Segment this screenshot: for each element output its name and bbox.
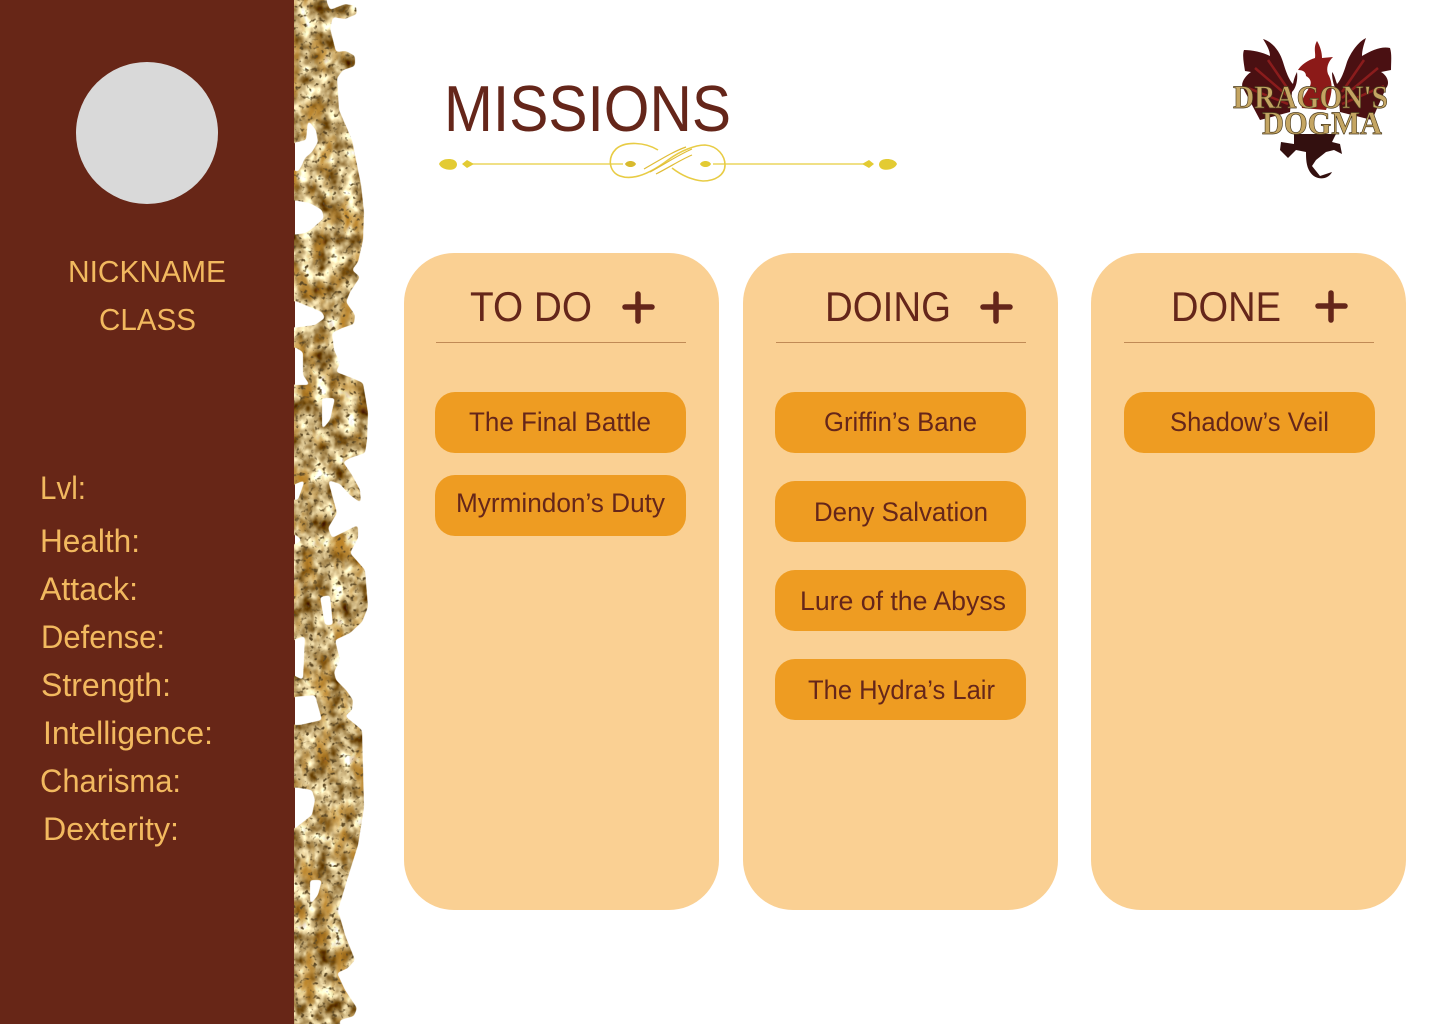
card: the hydra's lair: The Hydra’s Lair bbox=[808, 675, 995, 705]
card: myrmindon's duty bbox=[435, 475, 686, 536]
panel: character sidebar bbox=[0, 0, 295, 1024]
card: the hydra's lair bbox=[775, 659, 1026, 720]
card: griffin's bane bbox=[775, 392, 1026, 453]
panel: to do bbox=[404, 253, 719, 910]
card: shadow's veil: Shadow’s Veil bbox=[1170, 407, 1329, 437]
icon: plus bbox=[983, 294, 1010, 321]
title flourish divider bbox=[439, 143, 897, 181]
card: lure of the abyss bbox=[775, 570, 1026, 631]
stat: strength: Strength: bbox=[41, 667, 171, 703]
stat: dexterity: Dexterity: bbox=[43, 811, 179, 847]
panel: doing bbox=[743, 253, 1058, 910]
nickname: NICKNAME bbox=[68, 254, 226, 289]
card: deny salvation: Deny Salvation bbox=[814, 497, 988, 527]
logo lower body and tail bbox=[1280, 134, 1342, 178]
heading: done: DONE bbox=[1171, 283, 1281, 330]
stat: health: Health: bbox=[40, 523, 140, 559]
card: myrmindon's duty: Myrmindon’s Duty bbox=[456, 488, 665, 518]
card: griffin's bane: Griffin’s Bane bbox=[824, 407, 977, 437]
title: MISSIONS bbox=[444, 72, 731, 145]
stat: attack: Attack: bbox=[40, 571, 138, 607]
card: deny salvation bbox=[775, 481, 1026, 542]
stat: level: Lvl: bbox=[40, 470, 86, 506]
stat: charisma: Charisma: bbox=[40, 763, 181, 799]
panel: done bbox=[1091, 253, 1406, 910]
card: the final battle bbox=[435, 392, 686, 453]
logo wordmark bbox=[1233, 80, 1388, 142]
stat: defense: Defense: bbox=[41, 619, 165, 655]
card: lure of the abyss: Lure of the Abyss bbox=[800, 586, 1006, 616]
logo: Dragon's Dogma bbox=[1233, 38, 1391, 178]
icon: plus bbox=[625, 294, 652, 321]
logo wing veins bbox=[1248, 60, 1384, 104]
class: CLASS bbox=[99, 302, 196, 337]
logo wordmark: DRAGON'S bbox=[1233, 80, 1388, 116]
icon: plus bbox=[1318, 293, 1345, 320]
stat: intelligence: Intelligence: bbox=[43, 715, 213, 751]
logo left wing bbox=[1242, 39, 1297, 120]
heading: doing: DOING bbox=[825, 283, 951, 330]
gold baroque ornament bbox=[294, 0, 374, 1024]
logo wordmark: DOGMA bbox=[1262, 106, 1382, 142]
logo right wing bbox=[1332, 38, 1391, 120]
avatar circle bbox=[76, 62, 218, 204]
card: the final battle: The Final Battle bbox=[469, 407, 651, 437]
card: shadow's veil bbox=[1124, 392, 1375, 453]
logo dragon head and neck bbox=[1298, 41, 1333, 110]
heading: to do: TO DO bbox=[470, 283, 592, 330]
